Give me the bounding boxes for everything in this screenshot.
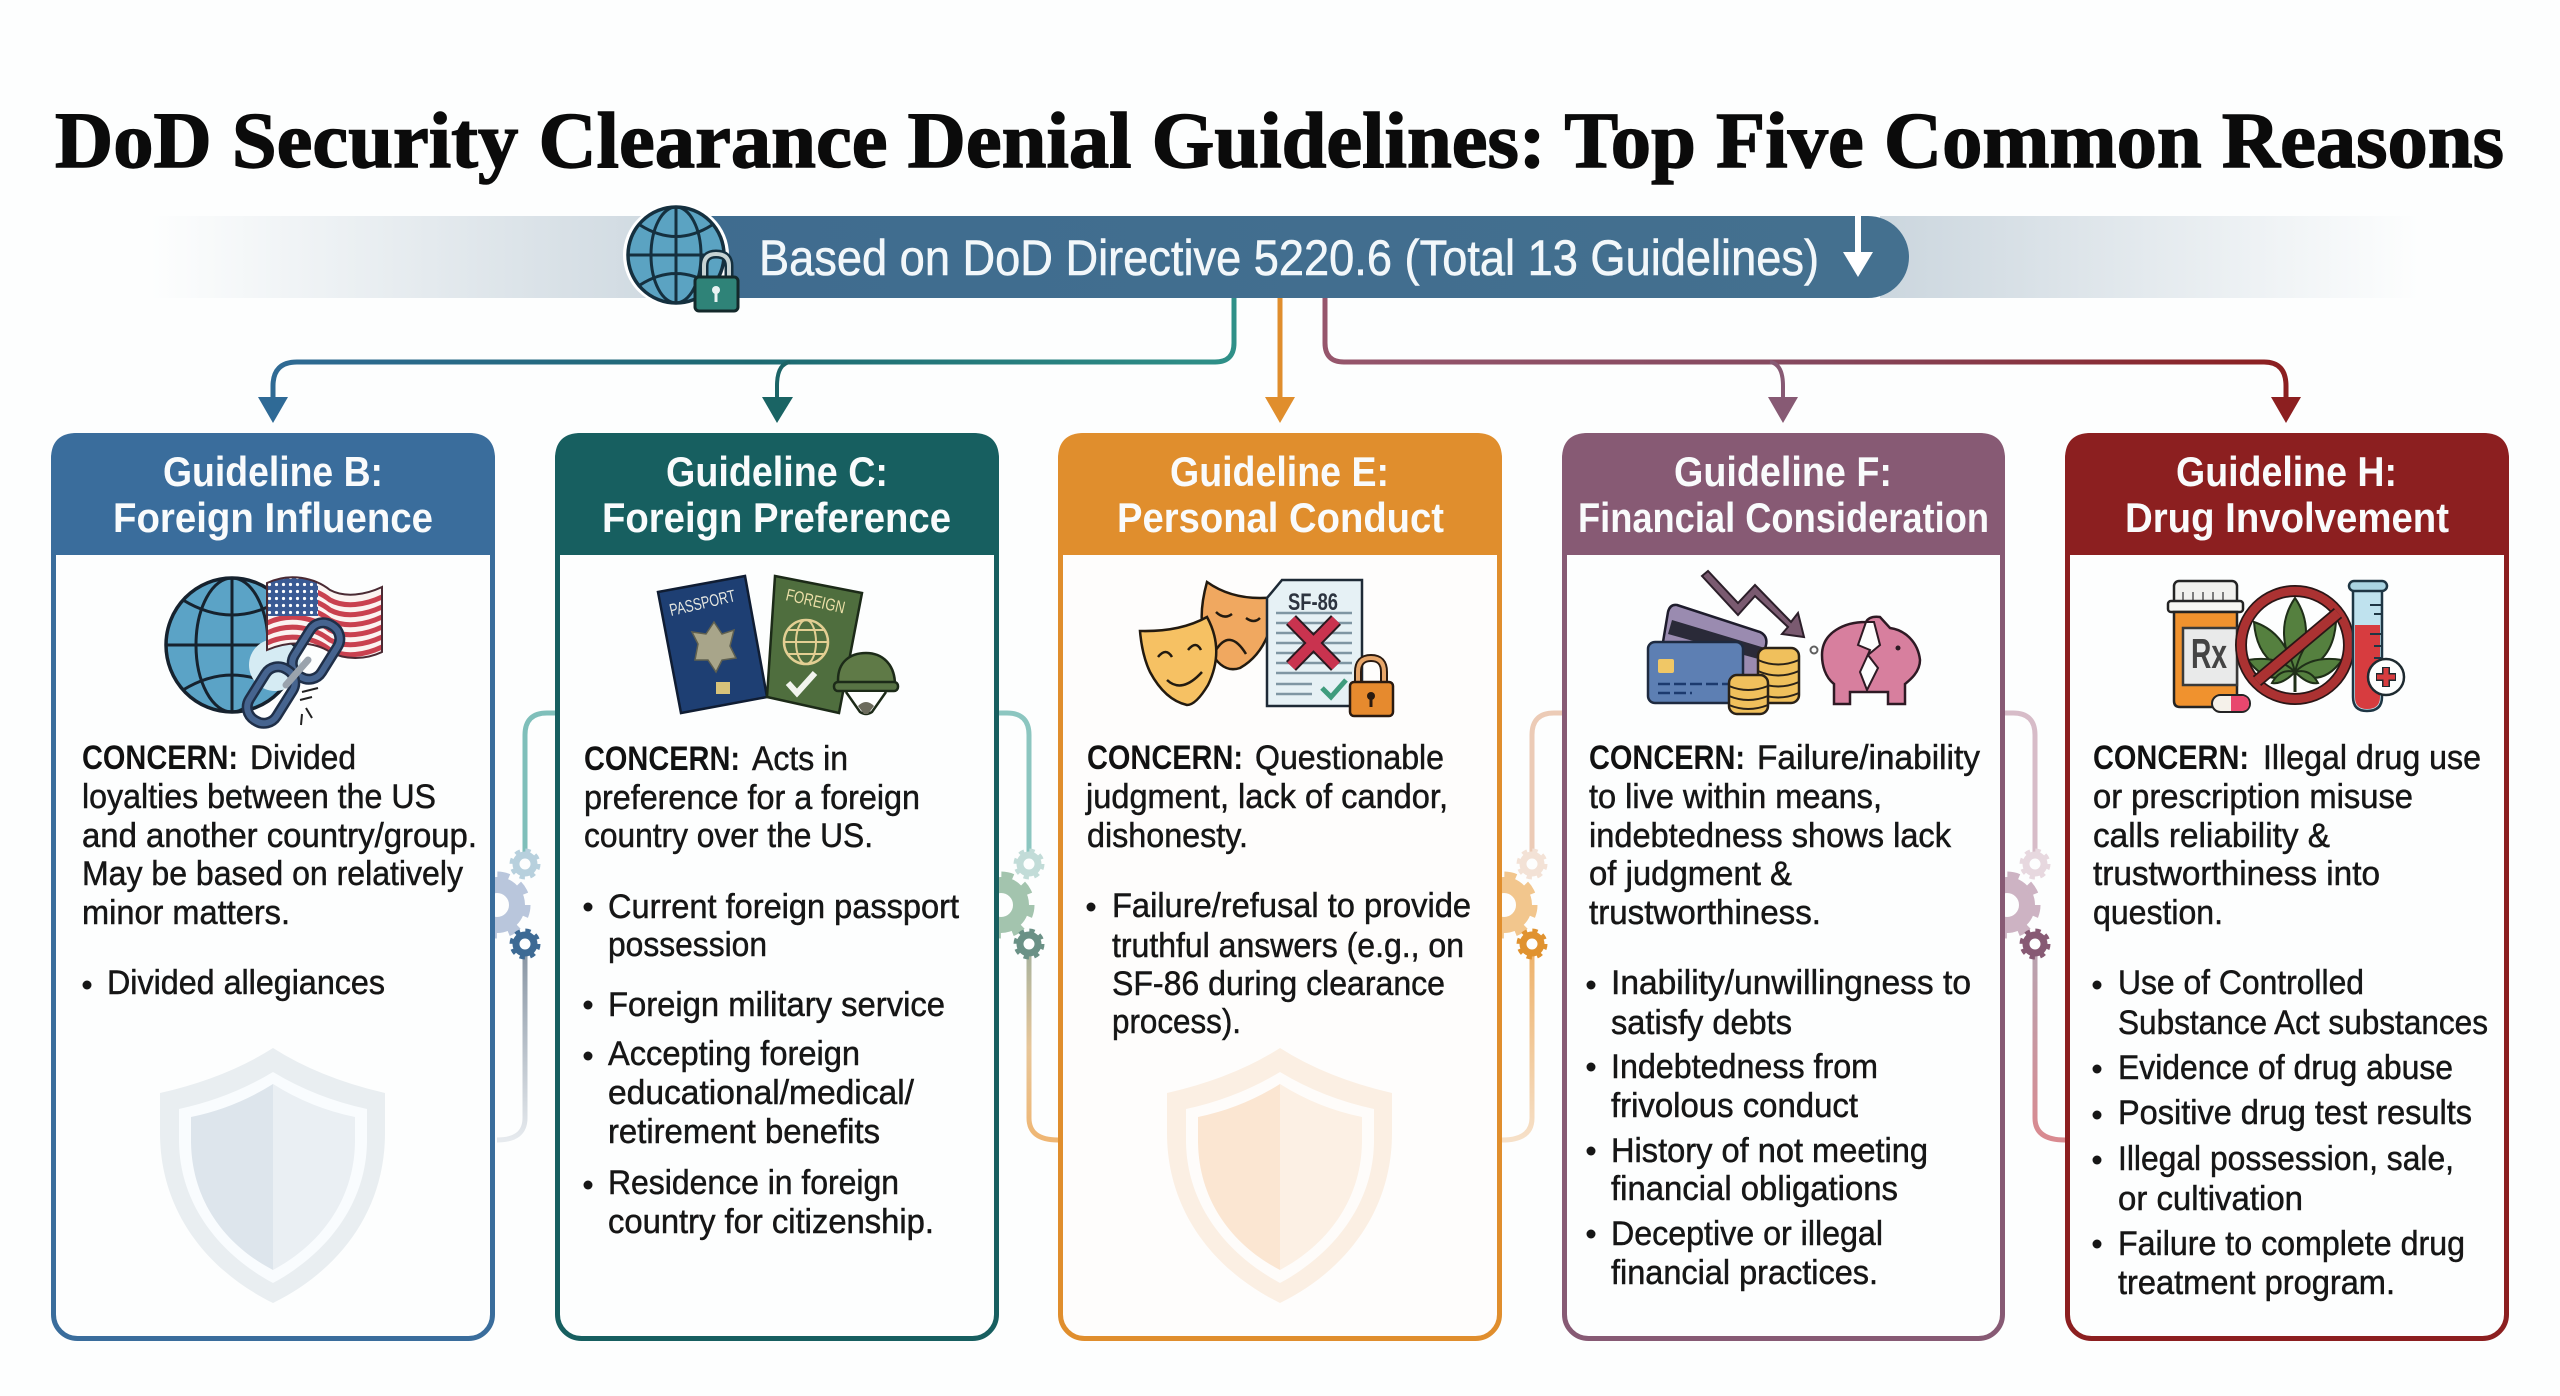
icon: banner down arrow xyxy=(1843,214,1873,277)
text block: concern F: CONCERN: xyxy=(1589,739,1745,777)
icon: prescription bottle, prohibited leaf and test tube xyxy=(2168,581,2404,712)
connector with gears: B to C xyxy=(468,713,555,1140)
panel header: Guideline B: Foreign Influence xyxy=(113,494,433,541)
text block: concern F: trustworthiness. xyxy=(1589,894,1821,932)
text block: concern H: trustworthiness into xyxy=(2093,855,2380,893)
icon: masks and SF-86 form xyxy=(1140,580,1393,716)
bullet list F xyxy=(1586,964,1971,1292)
text block: concern E: dishonesty. xyxy=(1087,817,1248,855)
connector with gears: E to F xyxy=(1475,713,1562,1140)
text block: concern H: calls reliability & xyxy=(2093,817,2330,855)
panel header: Guideline B: Guideline B: xyxy=(163,448,383,495)
bullet list H: or cultivation xyxy=(2118,1180,2303,1218)
text block: concern C: country over the US. xyxy=(584,817,873,855)
bullet list C: retirement benefits xyxy=(608,1113,880,1151)
bullet list E: SF-86 during clearance xyxy=(1112,965,1445,1003)
panel header: Guideline E xyxy=(1058,433,1502,555)
icon: passports and helmet xyxy=(658,576,898,714)
text block: concern H xyxy=(2093,739,2481,932)
bullet list F: History of not meeting xyxy=(1611,1132,1928,1170)
text block: concern B: Divided xyxy=(250,739,356,777)
panel header: Guideline C xyxy=(555,433,999,555)
bullet list F: Indebtedness from xyxy=(1611,1048,1878,1086)
panel: Guideline H xyxy=(2065,433,2509,1338)
bullet list F: Inability/unwillingness to xyxy=(1611,964,1971,1002)
bullet list H: Substance Act substances xyxy=(2118,1004,2488,1042)
panel header: Guideline E: Personal Conduct xyxy=(1117,494,1444,541)
bullet list H: Positive drug test results xyxy=(2118,1094,2472,1132)
text block: concern B: and another country/group. xyxy=(82,817,477,855)
bullet list C: Accepting foreign xyxy=(608,1035,860,1073)
text block: concern C: Acts in xyxy=(752,740,848,778)
text block: concern F: of judgment & xyxy=(1589,855,1792,893)
text block: concern F: indebtedness shows lack xyxy=(1589,817,1952,855)
panel header: Guideline H xyxy=(2065,433,2509,555)
icon: globe with padlock xyxy=(623,203,738,311)
text block: concern C xyxy=(584,740,920,855)
text block: concern F: Failure/inability xyxy=(1757,739,1980,777)
bullet list H: treatment program. xyxy=(2118,1264,2395,1302)
text block: concern H: CONCERN: xyxy=(2093,739,2249,777)
panel: Guideline B xyxy=(51,433,495,1338)
bullet list C: possession xyxy=(608,926,767,964)
text block: concern H: Illegal drug use xyxy=(2263,739,2481,777)
bullet list B: Divided allegiances xyxy=(107,964,385,1002)
icon: watermark shield B xyxy=(160,1048,385,1303)
bullet list C: Residence in foreign xyxy=(608,1164,899,1202)
title: DoD Security Clearance Denial Guidelines: Top Five Common Reasons xyxy=(55,98,2504,185)
text block: concern H: or prescription misuse xyxy=(2093,778,2413,816)
bullet list E: process). xyxy=(1112,1003,1241,1041)
bullet list H: Evidence of drug abuse xyxy=(2118,1049,2453,1087)
panel header: Guideline F xyxy=(1562,433,2005,555)
arrow: connector to guideline E xyxy=(1265,298,1295,423)
banner text: Based on DoD Directive 5220.6 (Total 13 Guidelines) xyxy=(759,230,1819,286)
bullet list C: Foreign military service xyxy=(608,986,945,1024)
bullet list H: Use of Controlled xyxy=(2118,964,2364,1002)
text block: concern B xyxy=(82,739,477,932)
text block: concern F xyxy=(1589,739,1980,932)
bullet list F: frivolous conduct xyxy=(1611,1087,1859,1125)
text block: concern E xyxy=(1085,739,1448,855)
connector with gears: F to H xyxy=(1978,713,2065,1140)
icon: masks and SF-86 form: SF-86 xyxy=(1288,589,1338,616)
panel: Guideline F xyxy=(1562,433,2005,1338)
text block: concern B: loyalties between the US xyxy=(82,778,436,816)
icon: prescription bottle, prohibited leaf and test tube: Rx xyxy=(2191,630,2227,677)
arrow: connector to guidelines B and C xyxy=(258,298,1234,423)
panel header: Guideline C: Guideline C: xyxy=(666,448,888,495)
panel header: Guideline H: Guideline H: xyxy=(2176,448,2397,495)
text block: concern B: minor matters. xyxy=(82,894,290,932)
text block: concern H: question. xyxy=(2093,894,2223,932)
panel: Guideline C xyxy=(555,433,999,1338)
connector with gears: C to E xyxy=(972,713,1058,1140)
bullet list F: satisfy debts xyxy=(1611,1004,1792,1042)
bullet list F: financial obligations xyxy=(1611,1170,1898,1208)
text block: concern E: judgment, lack of candor, xyxy=(1085,778,1448,816)
icon: passports and helmet: PASSPORT xyxy=(668,586,737,620)
arrow: connector to guidelines F and H xyxy=(1325,298,2301,423)
text block: concern C: preference for a foreign xyxy=(584,779,920,817)
bullet list C: country for citizenship. xyxy=(608,1203,934,1241)
text block: concern B: May be based on relatively xyxy=(82,855,463,893)
icon: globe, flag and broken chain xyxy=(166,570,382,729)
icon: passports and helmet: FOREIGN xyxy=(784,585,847,617)
banner xyxy=(150,203,2420,311)
bullet list E xyxy=(1086,887,1471,1041)
panel header: Guideline B xyxy=(51,433,495,555)
bullet list E: Failure/refusal to provide xyxy=(1112,887,1471,925)
bullet list F: Deceptive or illegal xyxy=(1611,1215,1883,1253)
bullet list C xyxy=(584,888,960,1241)
text block: concern B: CONCERN: xyxy=(82,739,238,777)
panel header: Guideline F: Financial Consideration xyxy=(1578,494,1989,541)
bullet list H: Failure to complete drug xyxy=(2118,1225,2465,1263)
bullet list C: educational/medical/ xyxy=(608,1074,915,1112)
panel header: Guideline C: Foreign Preference xyxy=(602,494,951,541)
panel header: Guideline F: Guideline F: xyxy=(1674,448,1892,495)
panel header: Guideline H: Drug Involvement xyxy=(2125,494,2449,541)
icon: credit cards, coins, falling arrow and broken piggy bank xyxy=(1648,571,1920,714)
icon: watermark shield E xyxy=(1167,1048,1392,1303)
bullet list E: truthful answers (e.g., on xyxy=(1112,927,1464,965)
bullet list F: financial practices. xyxy=(1611,1254,1878,1292)
panel header: Guideline E: Guideline E: xyxy=(1170,448,1389,495)
panel: Guideline E xyxy=(1058,433,1502,1338)
text block: concern E: Questionable xyxy=(1255,739,1444,777)
text block: concern E: CONCERN: xyxy=(1087,739,1243,777)
bullet list C: Current foreign passport xyxy=(608,888,960,926)
bullet list H: Illegal possession, sale, xyxy=(2118,1140,2454,1178)
text block: concern C: CONCERN: xyxy=(584,740,740,778)
text block: concern F: to live within means, xyxy=(1589,778,1882,816)
bullet list H xyxy=(2092,964,2488,1302)
